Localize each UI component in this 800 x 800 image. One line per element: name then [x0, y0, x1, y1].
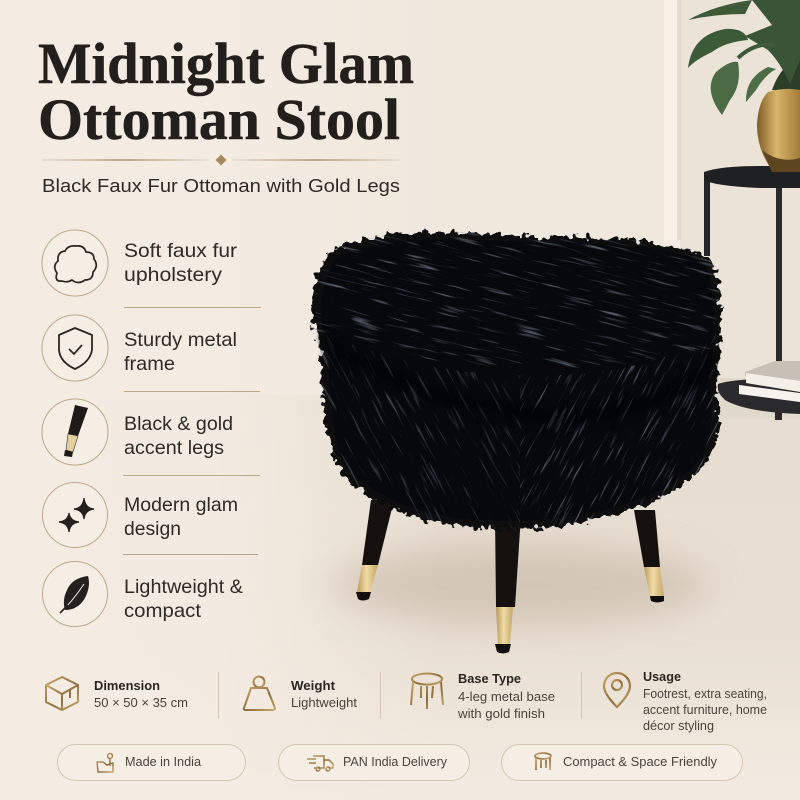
feature: modern glam design: Modern glam [124, 494, 238, 516]
spec: weight [244, 676, 358, 710]
spec: dimension: Dimension [94, 678, 160, 693]
icon: box [46, 677, 78, 710]
icon: small stool [535, 753, 551, 770]
left leg [356, 500, 394, 600]
feature: sturdy metal frame: Sturdy metal [124, 329, 237, 351]
badge: pan india delivery [278, 744, 470, 780]
centre leg [495, 515, 521, 654]
title: Midnight Glam [38, 31, 414, 96]
badge: pan india delivery: PAN India Delivery [343, 755, 448, 769]
right leg [634, 510, 664, 602]
spec: weight: Lightweight [291, 696, 358, 710]
spec: base type [411, 671, 555, 721]
stool: black faux fur body [310, 228, 724, 532]
badge: made in india: Made in India [125, 755, 201, 769]
icon: cloud fur [42, 230, 108, 296]
spec: usage: accent furniture, home [643, 703, 767, 717]
feature: sturdy metal frame [42, 315, 237, 381]
spec: usage [604, 669, 767, 733]
subtitle: Black Faux Fur Ottoman with Gold Legs [42, 175, 400, 196]
stool legs [356, 500, 664, 654]
feature: black and gold legs: Black & gold [124, 413, 233, 435]
feature: soft faux fur: upholstery [124, 264, 222, 286]
title divider with diamond [42, 154, 400, 166]
feature: black and gold legs: accent legs [124, 437, 224, 459]
feature: sturdy metal frame: frame [124, 353, 175, 375]
feature: soft faux fur: Soft faux fur [124, 240, 238, 262]
spec: base type: with gold finish [457, 707, 545, 721]
badge: compact and space friendly: Compact & Space Friendly [563, 755, 718, 769]
feature: black and gold legs [42, 399, 233, 465]
floor shadow [330, 545, 710, 625]
icon: delivery truck [307, 756, 333, 771]
badge: compact and space friendly [502, 744, 742, 780]
feature: soft faux fur [42, 230, 238, 296]
spec: base type: Base Type [458, 671, 521, 686]
feature: modern glam design: design [124, 518, 181, 540]
icon: feather [42, 562, 108, 626]
title [38, 31, 414, 152]
icon: stool leg [42, 399, 108, 465]
spec: usage: décor styling [643, 719, 714, 733]
spec: usage: Usage [643, 669, 681, 684]
icon: location pin [604, 673, 630, 707]
spec: base type: 4-leg metal base [458, 690, 555, 704]
icon: map pin [97, 754, 113, 772]
title: Ottoman Stool [38, 87, 400, 152]
feature: lightweight and compact: Lightweight & [124, 576, 243, 598]
spec: weight: Weight [291, 678, 336, 693]
spec: usage: Footrest, extra seating, [643, 687, 767, 701]
badge: made in india [58, 744, 246, 780]
feature: modern glam design [42, 482, 238, 548]
feature: lightweight and compact [42, 562, 243, 626]
spec: dimension: 50 × 50 × 35 cm [94, 696, 188, 710]
icon: sparkles [42, 482, 108, 548]
feature: lightweight and compact: compact [124, 600, 202, 622]
icon: shield check [42, 315, 108, 381]
side table with books [704, 166, 800, 420]
icon: stool [411, 674, 443, 709]
spec: dimension [46, 677, 188, 710]
potted plant [688, 0, 800, 172]
icon: kettle weight [244, 676, 275, 710]
